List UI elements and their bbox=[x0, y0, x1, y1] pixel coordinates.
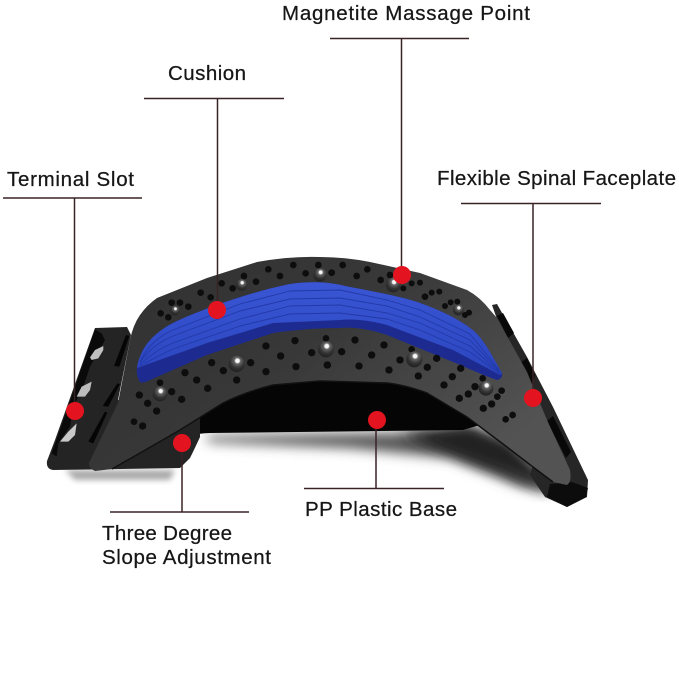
marker: PP Plastic Base bbox=[368, 411, 386, 429]
marker: Flexible Spinal Faceplate bbox=[524, 389, 542, 407]
marker: Terminal Slot bbox=[66, 402, 84, 420]
base: left foot and terminal slot bracket bbox=[47, 327, 200, 470]
product: spinal back stretcher bbox=[47, 257, 588, 507]
callout: Magnetite Massage Point bbox=[282, 2, 530, 284]
callout: PP Plastic Base bbox=[304, 411, 457, 521]
black underside of arch bbox=[180, 375, 480, 436]
label: Terminal Slot: Terminal Slot bbox=[7, 168, 134, 191]
leader line: Three Degree Slope Adjustment bbox=[110, 443, 249, 512]
massage nubs and magnets: left half bbox=[131, 262, 335, 430]
label: Cushion: Cushion bbox=[168, 62, 246, 85]
massage nubs and magnets: right half bbox=[324, 262, 516, 423]
callout: Flexible Spinal Faceplate bbox=[437, 167, 676, 407]
leader line: Terminal Slot bbox=[3, 198, 142, 411]
label: Three Degree Slope Adjustment: Three Degree bbox=[102, 522, 232, 545]
label: Flexible Spinal Faceplate: Flexible Spinal Faceplate bbox=[437, 167, 676, 190]
leader line: PP Plastic Base bbox=[304, 420, 444, 488]
flexible spinal faceplate bbox=[89, 257, 571, 485]
callout: Three Degree Slope Adjustment: Slope Adjustment bbox=[102, 546, 271, 569]
marker: Cushion bbox=[208, 301, 226, 319]
callout: Cushion bbox=[144, 62, 284, 319]
leader line: Cushion bbox=[144, 98, 284, 310]
floor shadow bbox=[65, 425, 555, 492]
terminal slot inserts bbox=[52, 329, 129, 457]
marker: Three Degree Slope Adjustment bbox=[173, 434, 191, 452]
label: PP Plastic Base: PP Plastic Base bbox=[305, 498, 457, 521]
base: right foot bbox=[492, 304, 588, 507]
leader line: Flexible Spinal Faceplate bbox=[461, 204, 601, 398]
leader line: Magnetite Massage Point bbox=[330, 38, 469, 275]
callout: Three Degree Slope Adjustment bbox=[102, 434, 271, 569]
blue cushion bbox=[137, 282, 502, 383]
marker: Magnetite Massage Point bbox=[393, 266, 411, 284]
callout: Terminal Slot bbox=[3, 168, 142, 420]
label: Magnetite Massage Point: Magnetite Massage Point bbox=[282, 2, 530, 25]
